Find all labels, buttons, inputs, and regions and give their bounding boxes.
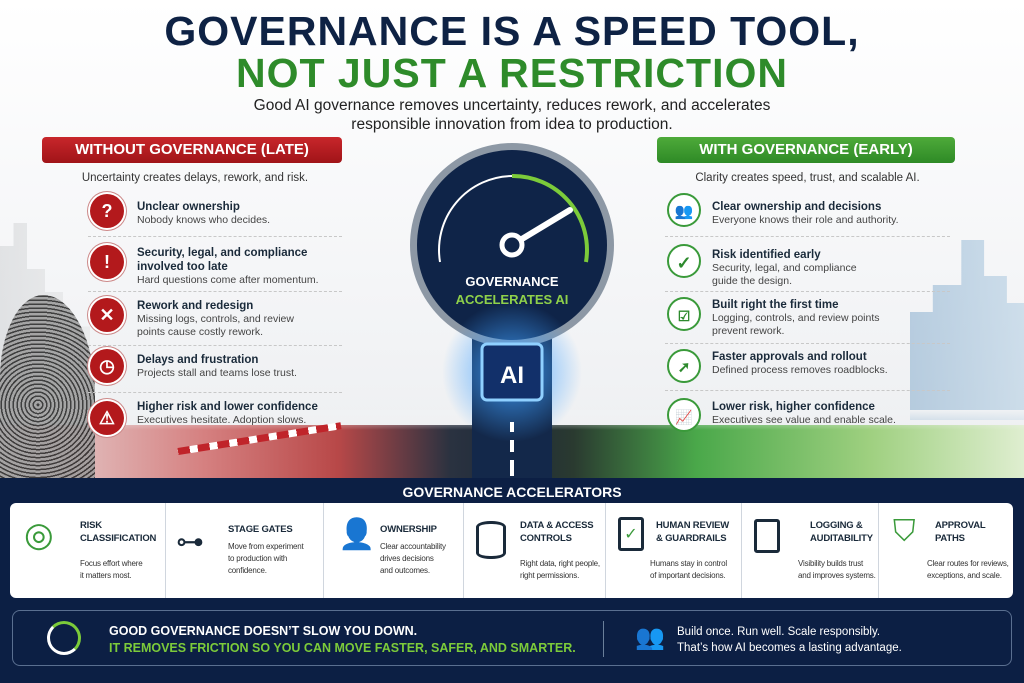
item: risk identified: guide the design.: [712, 275, 792, 287]
title: GOVERNANCE IS A SPEED TOOL,: [164, 8, 860, 54]
subtitle: Good AI governance removes uncertainty, reduces rework, and accelerates: [254, 97, 770, 114]
icon: people: 👥: [675, 203, 693, 220]
item: delays: [137, 354, 297, 379]
accel: risk: RISK: [80, 520, 102, 531]
accel: human review: ✓: [624, 526, 638, 543]
item: rework: [137, 300, 294, 338]
icon: tools: [90, 298, 124, 332]
accel: approval: PATHS: [935, 533, 965, 544]
accel: human review: HUMAN REVIEW: [656, 520, 729, 531]
panel: with governance: [657, 137, 955, 184]
accel: ownership: [324, 503, 464, 598]
bottom navy section: [0, 478, 1024, 683]
item: risk identified: Security, legal, and compliance: [712, 262, 857, 274]
icon: people: [667, 193, 701, 227]
footer text left: IT REMOVES FRICTION SO YOU CAN MOVE FASTER, SAFER, AND SMARTER.: [109, 641, 576, 655]
item: risk identified: Risk identified early: [712, 249, 821, 261]
accel: logging: LOGGING &: [810, 520, 863, 531]
text: NOT JUST A RESTRICTION: [236, 50, 788, 96]
icon: chart: [667, 398, 701, 432]
item: delays: Delays and frustration: [137, 354, 258, 366]
item: security late: Hard questions come after momentum.: [137, 274, 318, 286]
accel: ownership: and outcomes.: [380, 566, 430, 575]
banner green: WITH GOVERNANCE (EARLY): [699, 141, 913, 158]
item: clear ownership: [712, 201, 899, 226]
icon: clock: ◷: [99, 356, 115, 376]
item: higher risk: Higher risk and lower confidence: [137, 401, 318, 413]
footer text right: That’s how AI becomes a lasting advantage.: [677, 642, 902, 654]
heading: governance accelerators: GOVERNANCE ACCELERATORS: [402, 484, 622, 500]
gauge with AI chip: [410, 143, 614, 478]
accel: data: DATA & ACCESS: [520, 520, 593, 531]
item: higher risk: Executives hesitate. Adoption slows.: [137, 414, 306, 426]
left city: [0, 223, 88, 370]
item: rework: Rework and redesign: [137, 300, 253, 312]
item: unclear ownership: Unclear ownership: [137, 201, 240, 213]
footer callout: [12, 610, 1012, 666]
footer text right: [677, 626, 902, 654]
road red/green streaks: [0, 425, 1024, 478]
accel: logging: Visibility builds trust: [798, 559, 863, 568]
banner green: [657, 137, 955, 163]
item: unclear ownership: [137, 201, 270, 226]
accel: ownership: drives decisions: [380, 554, 434, 563]
item: built right: [712, 299, 880, 337]
icon: warning: [90, 401, 124, 435]
accel: logging: and improves systems.: [798, 571, 876, 580]
tangled wires: [0, 295, 95, 478]
accel: ownership: 👤: [338, 518, 375, 551]
gauge with AI chip: ACCELERATES AI: [456, 292, 568, 307]
icon: question: [90, 194, 124, 228]
accel: data: [464, 503, 606, 598]
item: rework: Missing logs, controls, and review: [137, 313, 294, 325]
item: faster approvals: [712, 351, 888, 376]
accel: approval: [893, 515, 1009, 580]
item: delays: Projects stall and teams lose trust.: [137, 367, 297, 379]
accel: data: Right data, right people,: [520, 559, 600, 568]
item: built right: prevent rework.: [712, 325, 784, 337]
icon: question: ?: [102, 201, 112, 221]
accel: risk: ◎: [24, 516, 54, 554]
icon: rocket: ➚: [678, 359, 690, 376]
gauge with AI chip: GOVERNANCE: [465, 274, 559, 289]
item: built right: Built right the first time: [712, 299, 838, 311]
item: clear ownership: Clear ownership and decisions: [712, 201, 881, 213]
item: security late: [137, 247, 318, 286]
footer text left: [109, 624, 576, 655]
accel: approval: exceptions, and scale.: [927, 571, 1002, 580]
item: lower risk: Lower risk, higher confidence: [712, 401, 875, 413]
footer text left: GOOD GOVERNANCE DOESN’T SLOW YOU DOWN.: [109, 624, 417, 638]
accel: human review: Humans stay in control: [650, 559, 727, 568]
banner red: [42, 137, 342, 163]
icon: shield: !: [104, 252, 110, 272]
accel: stage gates: ⊶: [176, 526, 204, 557]
icon: team: 👥: [635, 624, 665, 651]
accel: stage gates: to production with: [228, 554, 287, 563]
panel: without governance: [42, 137, 342, 184]
subheading: Clarity creates speed, trust, and scalable AI.: [695, 172, 920, 184]
item: security late: Security, legal, and compliance: [137, 247, 307, 259]
icon: tools: ✕: [99, 305, 115, 325]
accel: stage gates: Move from experiment: [228, 542, 304, 551]
item: lower risk: [712, 401, 896, 426]
icon: warning: ⚠: [99, 408, 115, 428]
icon: chart: 📈: [675, 409, 693, 425]
banner red: WITHOUT GOVERNANCE (LATE): [75, 141, 309, 158]
accel: stage gates: confidence.: [228, 566, 267, 575]
item: faster approvals: Defined process removes roadblocks.: [712, 364, 888, 376]
icon: clock: [90, 349, 124, 383]
accel: risk: Focus effort where: [80, 559, 143, 568]
subtitle: responsible innovation from idea to production.: [351, 116, 673, 133]
item: rework: points cause costly rework.: [137, 326, 263, 338]
accel: stage gates: [166, 503, 324, 598]
background scene: [0, 0, 1024, 480]
accel: risk: it matters most.: [80, 571, 131, 580]
item: faster approvals: Faster approvals and rollout: [712, 351, 867, 363]
item: higher risk: [137, 401, 318, 426]
accel: human review: [606, 503, 742, 598]
accel: data: right permissions.: [520, 571, 579, 580]
subheading: Uncertainty creates delays, rework, and risk.: [82, 172, 308, 184]
barrier: [177, 422, 342, 455]
accel: approval: Clear routes for reviews,: [927, 559, 1009, 568]
item: clear ownership: Everyone knows their role and authority.: [712, 214, 899, 226]
accel: approval: ⛉: [893, 515, 916, 548]
item: security late: involved too late: [137, 261, 228, 273]
item: unclear ownership: Nobody knows who decides.: [137, 214, 270, 226]
subtitle: [254, 97, 770, 133]
accel: risk: [10, 503, 166, 598]
item: lower risk: Executives see value and enable scale.: [712, 414, 896, 426]
accel: ownership: Clear accountability: [380, 542, 446, 551]
icon: shield: [90, 245, 124, 279]
accel: data: CONTROLS: [520, 533, 572, 544]
gauge with AI chip: AI: [500, 362, 524, 389]
accel: risk: CLASSIFICATION: [80, 533, 156, 544]
icon: speedometer: [47, 621, 81, 655]
accel: human review: & GUARDRAILS: [656, 533, 726, 544]
accel: human review: of important decisions.: [650, 571, 725, 580]
icon: rocket: [667, 349, 701, 383]
accel: approval: APPROVAL: [935, 520, 985, 531]
footer text right: Build once. Run well. Scale responsibly.: [677, 626, 880, 638]
icon: checklist: ☑: [678, 308, 690, 324]
icon: checklist: [667, 297, 701, 331]
right city: [910, 240, 1024, 420]
accel: ownership: OWNERSHIP: [380, 524, 437, 535]
accel: logging: AUDITABILITY: [810, 533, 873, 544]
icon: shield check: [667, 244, 701, 278]
panel: accelerators card: [10, 503, 1013, 598]
item: risk identified: [712, 249, 857, 287]
accel: stage gates: STAGE GATES: [228, 524, 292, 535]
accel: logging: [742, 503, 879, 598]
item: built right: Logging, controls, and review points: [712, 312, 880, 324]
icon: shield check: ✓: [676, 253, 692, 273]
